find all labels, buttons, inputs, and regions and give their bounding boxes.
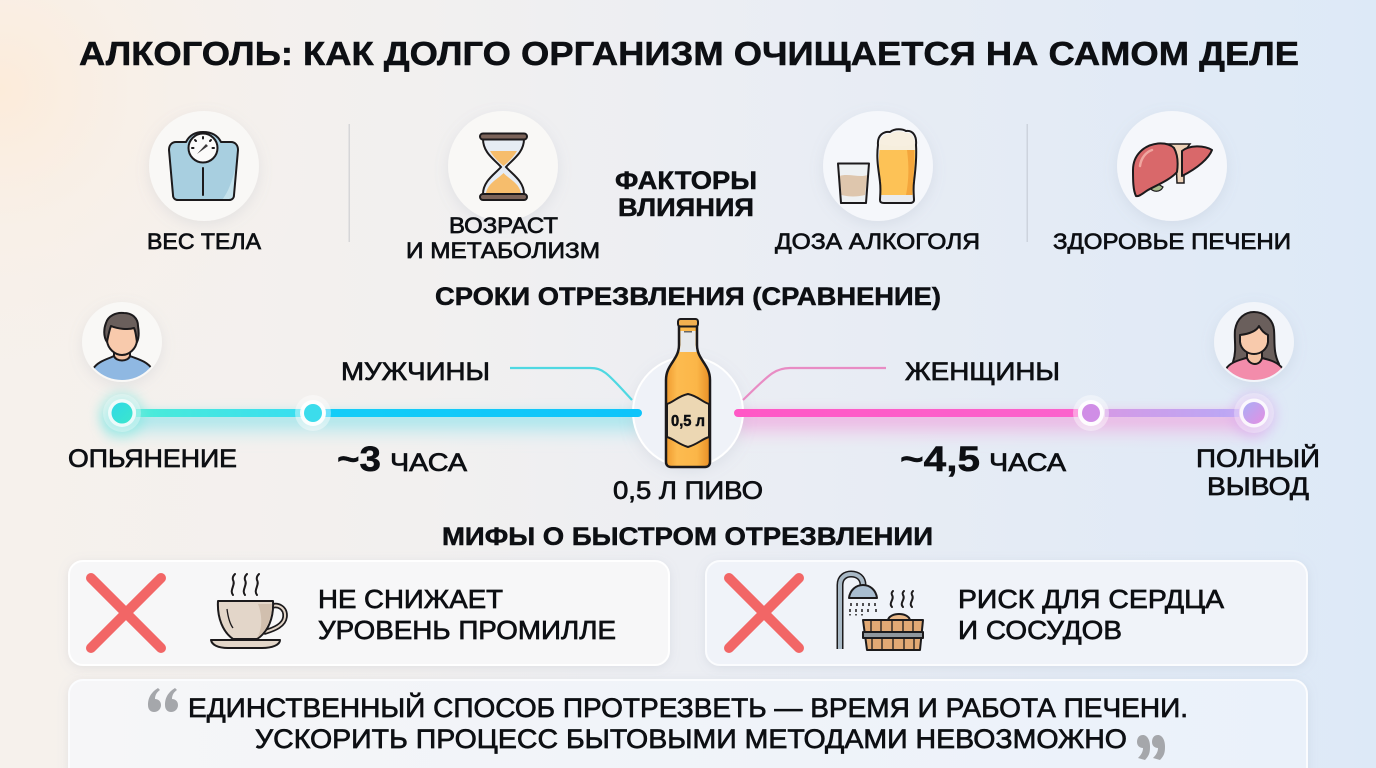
label: full elimination: ПОЛНЫЙ — [1196, 443, 1320, 473]
factor: body weight — [147, 111, 261, 254]
factor: age and metabolism — [406, 111, 600, 263]
factor: alcohol dose — [775, 111, 980, 254]
label: men: МУЖЧИНЫ — [341, 358, 490, 386]
icon: red cross — [91, 578, 161, 648]
label: intoxication: ОПЬЯНЕНИЕ — [68, 445, 237, 473]
text: only time and the liver: ЕДИНСТВЕННЫЙ СПОСОБ ПРОТРЕЗВЕТЬ — ВРЕМЯ И РАБОТА ПЕЧЕНИ. — [188, 692, 1188, 723]
panel: factors of influence — [147, 111, 1291, 263]
text: risk for heart and vessels: И СОСУДОВ — [958, 615, 1122, 645]
icon: coffee cup — [211, 574, 285, 648]
node: men's three hours — [295, 395, 331, 431]
icon: red cross — [729, 578, 799, 648]
label: beer amount: 0,5 Л ПИВО — [613, 477, 763, 505]
icon: closing quote — [1137, 735, 1165, 760]
central circle — [633, 357, 743, 467]
glow under the men's line — [105, 413, 640, 443]
value: women about 4.5 hours: ~4,5 — [900, 440, 980, 479]
text: does not lower blood alcohol: УРОВЕНЬ ПРОМИЛЛЕ — [318, 615, 616, 645]
label: ВЕС ТЕЛА — [147, 229, 261, 254]
icon: shower and wooden tub — [840, 574, 923, 650]
icon: beer bottle 0.5 l — [666, 319, 710, 467]
node: intoxication — [100, 393, 144, 437]
panel: coffee myth — [69, 561, 669, 665]
icon: shot and beer glass — [838, 129, 916, 203]
timeline chart — [100, 357, 1276, 467]
label: full elimination — [1196, 443, 1320, 501]
label: full elimination: ВЫВОД — [1207, 473, 1309, 501]
label: ЗДОРОВЬЕ ПЕЧЕНИ — [1053, 229, 1291, 254]
value: men about 3 hours: ЧАСА — [390, 449, 467, 477]
heading: factors: ВЛИЯНИЯ — [618, 194, 754, 222]
avatar: woman — [1214, 302, 1294, 385]
connector: men — [510, 368, 632, 400]
heading: factors — [615, 167, 757, 222]
heading: factors: ФАКТОРЫ — [615, 167, 757, 195]
label: ВОЗРАСТ — [449, 213, 558, 238]
avatar: man — [82, 302, 162, 385]
text: risk for heart and vessels — [958, 584, 1225, 645]
women's line — [734, 409, 1239, 417]
value: women about 4.5 hours: ЧАСА — [989, 449, 1066, 477]
panel: conclusion quote — [69, 680, 1307, 768]
text: risk for heart and vessels: РИСК ДЛЯ СЕРДЦА — [958, 584, 1225, 614]
label: ДОЗА АЛКОГОЛЯ — [775, 229, 980, 254]
connector: women — [743, 368, 886, 400]
title: АЛКОГОЛЬ: КАК ДОЛГО ОРГАНИЗМ ОЧИЩАЕТСЯ НА САМОМ ДЕЛЕ — [79, 35, 1299, 72]
icon: hourglass — [480, 134, 527, 200]
text: does not lower blood alcohol — [318, 584, 616, 645]
panel: shower and sauna myth — [706, 561, 1307, 665]
icon: scale — [169, 132, 238, 200]
icon: liver — [1133, 143, 1212, 196]
label: women: ЖЕНЩИНЫ — [905, 358, 1060, 386]
factor: liver health — [1053, 111, 1291, 254]
icon: opening quote — [148, 688, 178, 712]
men's line — [136, 409, 642, 417]
text: only time and the liver — [188, 692, 1188, 754]
factor: age and metabolism: И МЕТАБОЛИЗМ — [406, 238, 600, 263]
heading: myths: МИФЫ О БЫСТРОМ ОТРЕЗВЛЕНИИ — [442, 523, 933, 551]
heading: sobering timeline: СРОКИ ОТРЕЗВЛЕНИЯ (СРАВНЕНИЕ) — [435, 283, 941, 311]
value: women about 4.5 hours — [900, 440, 1066, 479]
node: women's four and a half hours — [1073, 395, 1109, 431]
value: men about 3 hours — [337, 440, 467, 479]
text: does not lower blood alcohol: НЕ СНИЖАЕТ — [318, 584, 503, 614]
glow under the women's line — [736, 413, 1261, 443]
node: full elimination — [1232, 393, 1276, 437]
value: men about 3 hours: ~3 — [337, 440, 381, 479]
text: only time and the liver: УСКОРИТЬ ПРОЦЕСС БЫТОВЫМИ МЕТОДАМИ НЕВОЗМОЖНО — [255, 724, 1127, 754]
icon: beer bottle 0.5 l: 0,5 л — [671, 413, 705, 430]
